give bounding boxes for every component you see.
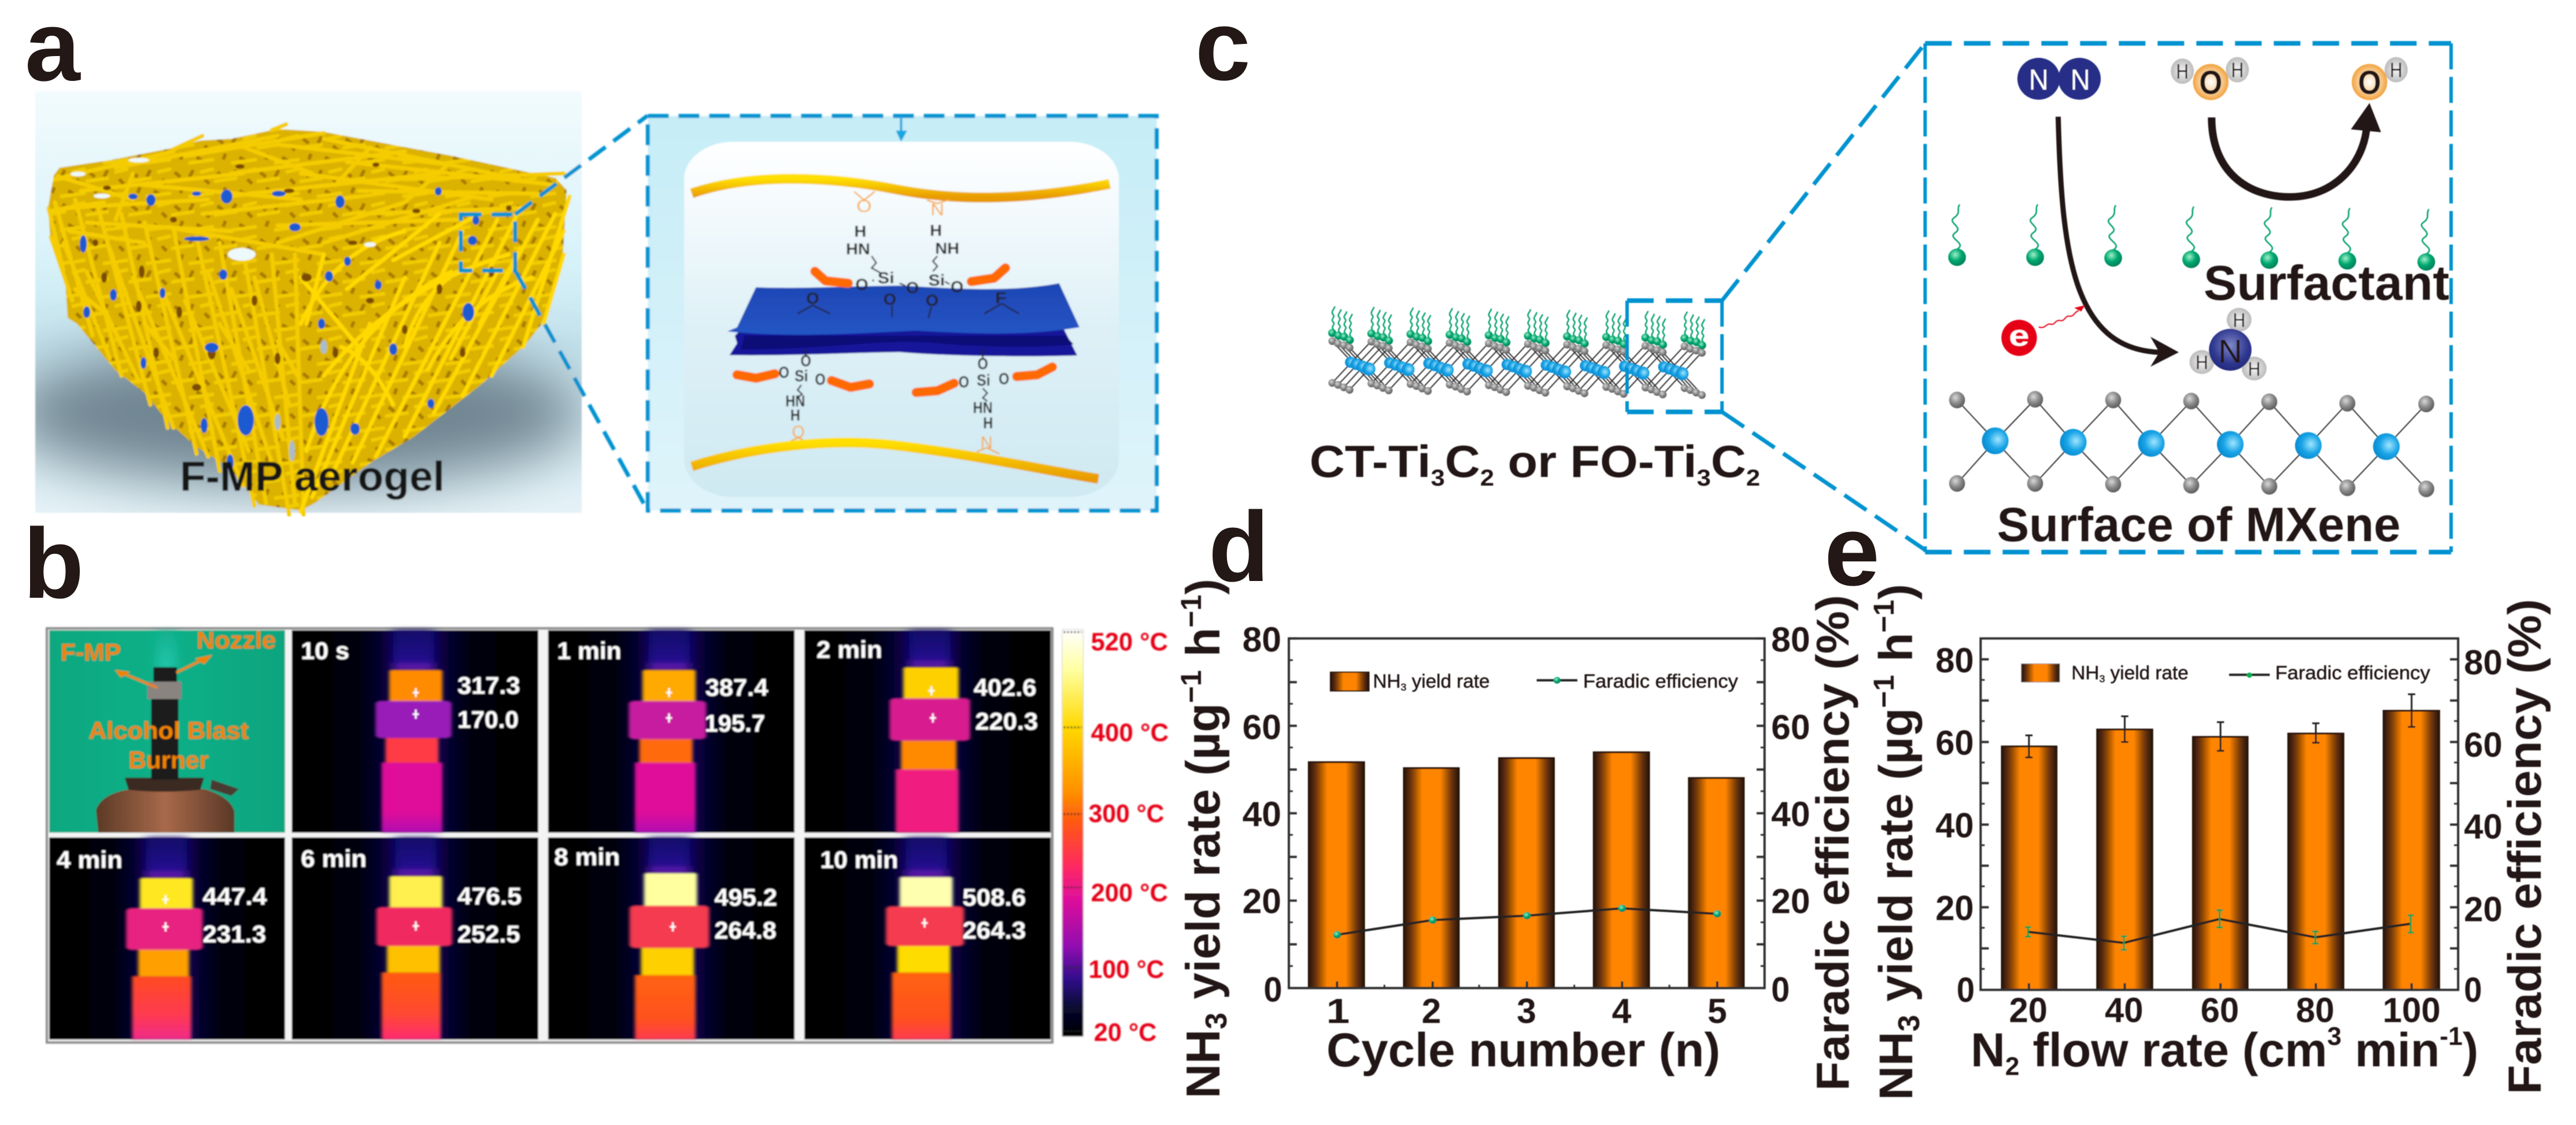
right axis numbers: 80 bbox=[2464, 643, 2503, 682]
thermal image: 1 min: 1 min bbox=[557, 638, 622, 664]
legend bbox=[2021, 662, 2430, 684]
gold fibre: top bbox=[692, 179, 1110, 198]
thermal image: 4 min: 447.4 bbox=[202, 883, 267, 911]
OH molecule: O bbox=[2358, 64, 2381, 101]
right axis numbers: 40 bbox=[2464, 808, 2503, 846]
fibres: right face bbox=[301, 197, 570, 512]
chemical labels: H bbox=[930, 221, 942, 239]
chemical labels: O bbox=[906, 279, 919, 297]
MXene chain (side view) bbox=[1328, 306, 1706, 399]
thermal image: 6 min: 476.5 bbox=[457, 883, 522, 910]
legend: 3 bbox=[1400, 682, 1406, 693]
inset: interface chemistry: O bbox=[999, 370, 1009, 388]
dashed zoom callout bbox=[1627, 43, 2451, 552]
chemical labels: N bbox=[930, 200, 944, 219]
thermal image: 10 min bbox=[804, 838, 1051, 1039]
electron: e bbox=[2009, 319, 2030, 352]
legend: Faradic efficiency bbox=[1583, 671, 1738, 692]
caption: CT-Ti3C2 or FO-Ti3C2: 3 bbox=[1697, 465, 1711, 491]
left axis numbers: 40 bbox=[1935, 806, 1974, 845]
inset: interface chemistry bbox=[648, 116, 1156, 510]
colour scale bar: 20 °C bbox=[1094, 1019, 1156, 1046]
arrow: H2O to OH bbox=[2212, 103, 2381, 197]
y axis title: NH3 yield rate: −1 bbox=[1175, 670, 1207, 703]
photo: alcohol blast burner: Burner bbox=[128, 747, 209, 774]
x axis numbers: 20 bbox=[2009, 991, 2048, 1030]
right axis numbers: 60 bbox=[1771, 708, 1810, 747]
thermal grid frame bbox=[47, 628, 1052, 1042]
thermal image: 10 s: 170.0 bbox=[457, 706, 519, 733]
photo: alcohol blast burner bbox=[49, 627, 285, 832]
NH3 molecule: H bbox=[2233, 309, 2245, 331]
dark gaps between fibres bbox=[93, 162, 512, 391]
chemical labels: O bbox=[884, 291, 896, 308]
thermal image: 6 min bbox=[292, 838, 538, 1039]
N2 molecule bbox=[2017, 58, 2101, 99]
x axis title: 3 bbox=[2327, 1022, 2342, 1050]
legend: 3 bbox=[2099, 673, 2105, 684]
left axis numbers: 60 bbox=[1935, 724, 1974, 763]
thermal image: 10 s: 10 s bbox=[301, 638, 349, 664]
NH3 molecule: H bbox=[2248, 358, 2260, 380]
chemical labels: Si bbox=[878, 269, 895, 287]
thermal image: 6 min: 252.5 bbox=[457, 921, 520, 948]
thermal image: 10 min: 264.3 bbox=[962, 917, 1026, 944]
right axis numbers bbox=[2464, 643, 2503, 1010]
thermal image: 8 min: 264.8 bbox=[714, 917, 777, 944]
right axis numbers: 0 bbox=[2464, 971, 2482, 1010]
zoom-in dashed callout bbox=[461, 116, 648, 510]
thermal image: 10 s bbox=[292, 630, 538, 832]
chemical labels: HN bbox=[785, 393, 805, 410]
thermal image: 2 min bbox=[804, 630, 1051, 832]
colour scale bar: 100 °C bbox=[1089, 956, 1164, 983]
x axis numbers: 80 bbox=[2296, 991, 2334, 1030]
thermal image: 10 min: 10 min bbox=[821, 846, 898, 874]
left axis numbers bbox=[1243, 621, 1282, 1009]
chemical labels: Si bbox=[794, 367, 808, 385]
left axis numbers: 60 bbox=[1243, 708, 1281, 747]
x axis title: flow rate (cm bbox=[2020, 1023, 2327, 1076]
gold fibre: bottom bbox=[692, 443, 1099, 479]
arrow: pressure bbox=[900, 116, 902, 139]
thermal image: 6 min: 6 min bbox=[301, 845, 367, 872]
colour scale bar: 400 °C bbox=[1091, 719, 1169, 746]
y axis title: NH3 yield rate: 3 bbox=[1893, 1015, 1926, 1031]
left axis numbers bbox=[1935, 641, 1975, 1010]
thermal image: 10 min: 508.6 bbox=[962, 884, 1026, 911]
thermal image: 2 min: 402.6 bbox=[974, 674, 1036, 701]
caption: CT-Ti3C2 or FO-Ti3C2: CT-Ti bbox=[1310, 436, 1583, 487]
colour scale bar bbox=[1062, 628, 1169, 1046]
thermal image: 1 min bbox=[548, 630, 794, 832]
bars bbox=[2001, 710, 2440, 990]
y axis title: NH3 yield rate: yield rate (µg bbox=[1870, 708, 1923, 1015]
legend: yield rate bbox=[2105, 662, 2189, 683]
left axis numbers: 40 bbox=[1243, 795, 1281, 834]
x axis title: N bbox=[1971, 1023, 2013, 1076]
photo: alcohol blast burner: Alcohol Blast bbox=[88, 717, 249, 744]
x axis numbers bbox=[2009, 991, 2441, 1030]
colour scale bar: 300 °C bbox=[1089, 800, 1164, 827]
panel c: MXene schematic: H bbox=[2390, 59, 2403, 82]
arrow: N2 to NH3 bbox=[2058, 117, 2179, 367]
chemical labels: NH bbox=[935, 240, 959, 257]
panel c: MXene schematic bbox=[1310, 43, 2451, 552]
y axis title: NH3 yield rate: h bbox=[1870, 632, 1923, 675]
x axis numbers: 2 bbox=[1422, 992, 1441, 1031]
thermal image: 10 s: 317.3 bbox=[457, 672, 520, 700]
thermal image: 1 min: 195.7 bbox=[704, 710, 765, 737]
x axis title: Cycle number (n) bbox=[1326, 1023, 1720, 1076]
left axis numbers: 0 bbox=[1957, 971, 1975, 1010]
x axis numbers: 60 bbox=[2201, 991, 2239, 1030]
chemical labels: H bbox=[983, 415, 993, 432]
y axis title: NH3 yield rate: yield rate (µg bbox=[1176, 703, 1230, 1013]
linker chains bbox=[797, 256, 1019, 401]
chemical labels: O bbox=[951, 278, 963, 296]
y axis title: NH3 yield rate: −1 bbox=[1868, 675, 1900, 708]
chemical labels: O bbox=[926, 292, 938, 310]
y axis title: Faradic efficiency: Faradic efficiency (%) bbox=[2499, 599, 2551, 1094]
colour scale bar: 520 °C bbox=[1091, 628, 1168, 656]
blue MXene spots bbox=[80, 187, 479, 471]
chemical labels: HN bbox=[846, 240, 870, 258]
H2O molecule: H bbox=[2176, 60, 2189, 83]
x axis numbers: 5 bbox=[1708, 992, 1727, 1031]
photo: alcohol blast burner: Nozzle bbox=[197, 627, 276, 654]
thermal image: 8 min: 495.2 bbox=[714, 884, 777, 911]
left axis numbers: 80 bbox=[1243, 621, 1281, 660]
axes frame and ticks bbox=[1980, 638, 2458, 990]
caption: CT-Ti3C2 or FO-Ti3C2: C bbox=[1445, 436, 1480, 487]
N2 molecule: N bbox=[2071, 64, 2090, 96]
chemical labels: O bbox=[856, 197, 871, 216]
chemical labels: O bbox=[806, 290, 819, 308]
OH molecule bbox=[2352, 57, 2408, 101]
thermal image: 2 min: 2 min bbox=[816, 636, 882, 663]
chemical labels: O bbox=[815, 371, 826, 388]
y axis title: NH3 yield rate: ) bbox=[1870, 584, 1923, 599]
left axis numbers: 80 bbox=[1935, 641, 1974, 680]
chemical labels: O bbox=[779, 364, 789, 382]
surfactant row bbox=[1948, 205, 2435, 271]
caption: CT-Ti3C2 or FO-Ti3C2: 3 bbox=[1431, 465, 1445, 491]
colour scale bar: 200 °C bbox=[1091, 879, 1168, 907]
NH3 molecule: N bbox=[2218, 334, 2242, 369]
bars bbox=[1308, 752, 1745, 988]
panel e: flow rate chart bbox=[1868, 584, 2551, 1100]
faradic efficiency line bbox=[1333, 905, 1721, 938]
yield error bars bbox=[2026, 694, 2415, 757]
axes frame and ticks bbox=[1289, 638, 1765, 988]
NH3 molecule bbox=[2189, 308, 2267, 380]
chemical labels: H bbox=[854, 223, 866, 240]
electron bbox=[2001, 305, 2085, 356]
y axis title: NH3 yield rate: h bbox=[1176, 627, 1230, 670]
caption: CT-Ti3C2 or FO-Ti3C2: C bbox=[1711, 436, 1746, 487]
thermal image: 4 min bbox=[49, 838, 285, 1039]
x axis numbers: 100 bbox=[2383, 991, 2441, 1030]
x axis numbers: 1 bbox=[1326, 992, 1350, 1031]
thermal image: 4 min: 231.3 bbox=[202, 921, 266, 948]
photo: alcohol blast burner: F-MP bbox=[61, 639, 121, 666]
thermal image: 8 min: 8 min bbox=[554, 843, 620, 871]
panel a: aerogel and inset bbox=[6, 91, 1156, 515]
y axis title: Faradic efficiency: Faradic efficiency (%) bbox=[1807, 595, 1858, 1091]
left axis numbers: 0 bbox=[1263, 971, 1282, 1009]
aerogel illustration bbox=[6, 91, 584, 515]
x axis numbers: 4 bbox=[1612, 992, 1631, 1031]
blue MXene sheet bbox=[727, 283, 1080, 356]
holes in the fibre network bbox=[71, 158, 376, 261]
chemical labels: N bbox=[981, 433, 993, 452]
NH3 molecule: H bbox=[2196, 351, 2208, 373]
thermal image: 8 min bbox=[548, 838, 794, 1039]
caption: CT-Ti3C2 or FO-Ti3C2: 2 bbox=[1480, 465, 1494, 491]
right axis numbers: 40 bbox=[1771, 795, 1810, 834]
y axis title: NH3 yield rate: NH bbox=[1176, 1029, 1230, 1098]
H2O molecule: O bbox=[2199, 64, 2222, 101]
legend bbox=[1330, 671, 1738, 693]
chemical labels: F bbox=[995, 289, 1007, 307]
legend: Faradic efficiency bbox=[2275, 662, 2430, 683]
orange surfactant chains bbox=[737, 268, 1052, 393]
left axis numbers: 20 bbox=[1243, 882, 1281, 921]
right axis numbers: 20 bbox=[1771, 882, 1810, 921]
legend: NH bbox=[1373, 671, 1406, 692]
caption: CT-Ti3C2 or FO-Ti3C2: or FO-Ti bbox=[1494, 436, 1697, 487]
caption: F-MP aerogel: F-MP aerogel bbox=[180, 454, 445, 500]
right axis numbers: 20 bbox=[2464, 890, 2503, 929]
chemical labels: H bbox=[790, 406, 800, 424]
panel d: cycling chart bbox=[1175, 579, 1858, 1098]
panel label: b: b bbox=[23, 508, 84, 619]
y axis title: NH3 yield rate: 3 bbox=[1200, 1013, 1233, 1029]
legend: yield rate bbox=[1406, 671, 1490, 692]
y axis title: NH3 yield rate: NH bbox=[1870, 1032, 1923, 1100]
panel label: e: e bbox=[1824, 495, 1880, 606]
y axis title: NH3 yield rate: −1 bbox=[1868, 599, 1900, 632]
chemical labels: O bbox=[959, 373, 969, 391]
chemical labels: O bbox=[792, 422, 805, 441]
right axis numbers bbox=[1771, 621, 1810, 1009]
chemical labels: O bbox=[801, 352, 811, 370]
x axis numbers: 40 bbox=[2105, 991, 2143, 1030]
x axis title: 2 bbox=[2005, 1052, 2020, 1080]
left axis numbers: 20 bbox=[1935, 889, 1974, 928]
chemical labels: O bbox=[855, 276, 868, 294]
chemical labels: O bbox=[977, 355, 988, 373]
panel b: thermal images bbox=[47, 627, 1169, 1046]
right axis numbers: 80 bbox=[1771, 621, 1810, 660]
y axis title: NH3 yield rate: −1 bbox=[1175, 595, 1207, 627]
fibres: left face bbox=[49, 199, 304, 515]
chemical labels: Si bbox=[928, 272, 945, 289]
panel c: MXene schematic: 2 bbox=[1746, 465, 1760, 491]
panel label: d: d bbox=[1208, 491, 1269, 602]
y axis title: NH3 yield rate: ) bbox=[1176, 579, 1230, 595]
chemical labels bbox=[779, 197, 1009, 452]
x axis numbers: 3 bbox=[1517, 992, 1536, 1031]
fibres: top face bbox=[49, 124, 564, 254]
thermal image: 1 min: 387.4 bbox=[705, 674, 768, 701]
x axis numbers bbox=[1326, 992, 1727, 1031]
faradic efficiency line with error bars bbox=[2025, 910, 2414, 950]
H2O molecule bbox=[2171, 57, 2249, 101]
thermal image: 2 min: 220.3 bbox=[975, 708, 1038, 735]
chemical labels: Si bbox=[977, 372, 991, 389]
legend: NH bbox=[2071, 662, 2105, 683]
panel c: MXene schematic: H bbox=[2231, 59, 2244, 82]
N2 molecule: N bbox=[2029, 64, 2049, 96]
x axis title: ) bbox=[2463, 1023, 2478, 1076]
right axis numbers: 0 bbox=[1771, 971, 1790, 1009]
chemical labels: HN bbox=[973, 399, 993, 417]
right axis numbers: 60 bbox=[2464, 726, 2503, 764]
x axis title: min bbox=[2342, 1023, 2440, 1076]
MXene surface lattice bbox=[1949, 391, 2434, 497]
x axis title: -1 bbox=[2440, 1022, 2463, 1050]
thermal image: 4 min: 4 min bbox=[57, 846, 123, 874]
